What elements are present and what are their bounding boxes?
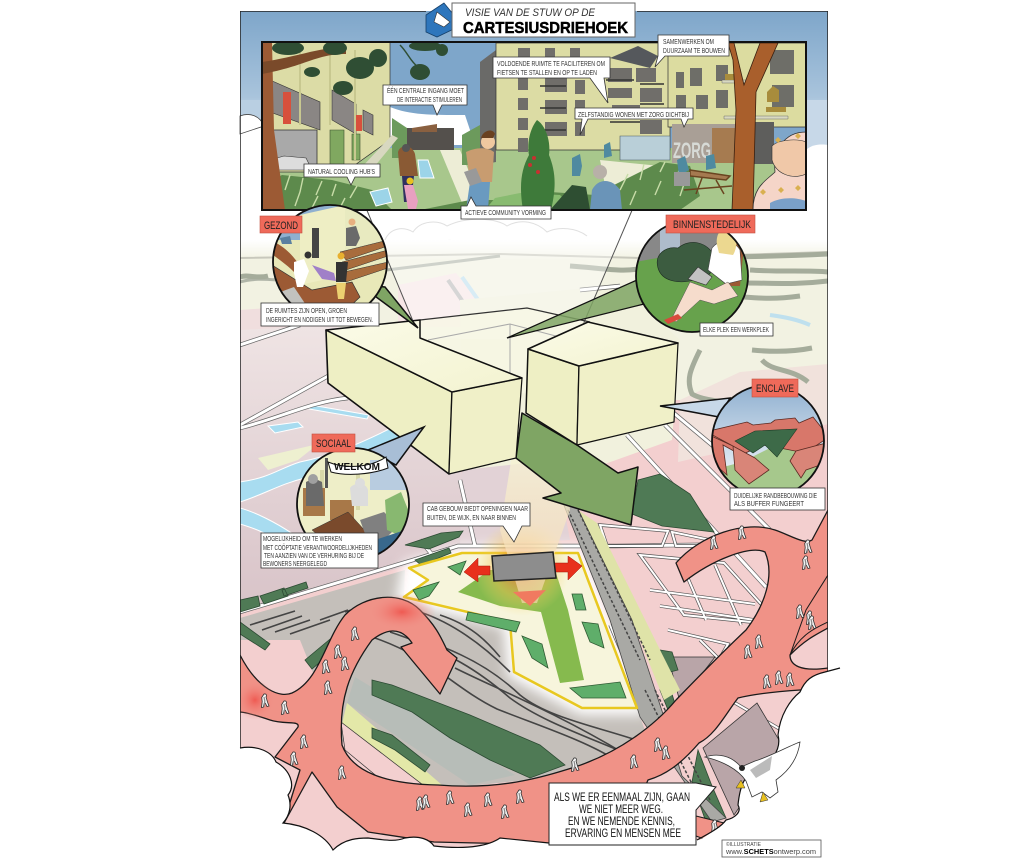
textbox enclave: ALS BUFFER FUNGEERT bbox=[734, 501, 805, 508]
bubble: centrale ingang: DE INTERACTIE STIMULEREN bbox=[397, 97, 462, 104]
top panel illustration bbox=[262, 41, 806, 210]
beam arrow bbox=[513, 590, 546, 606]
ghost building bbox=[420, 308, 672, 400]
callout bottom: ALS WE ER EENMAAL ZIJN, GAAN bbox=[554, 790, 690, 804]
textbox gezond: INGERICHT EN NODIGEN UIT TOT BEWEGEN. bbox=[266, 317, 373, 324]
title box bbox=[452, 3, 635, 37]
title box: VISIE VAN DE STUW OP DE bbox=[465, 7, 596, 19]
grey rail yard bbox=[240, 570, 650, 790]
bubble: cooling bbox=[304, 164, 380, 185]
label sociaal: SOCIAAL bbox=[316, 438, 351, 450]
bubble: centrale ingang bbox=[383, 85, 467, 115]
street blocks bbox=[600, 525, 790, 735]
tree bands grey-green bbox=[240, 254, 828, 404]
label binnenstedelijk bbox=[666, 215, 755, 233]
label gezond: GEZOND bbox=[264, 220, 298, 232]
callout bottom: EN WE NEMENDE KENNIS, bbox=[568, 814, 675, 828]
red arrow right bbox=[554, 556, 582, 580]
roads bbox=[240, 286, 830, 612]
bubble: cab gebouw: CAB GEBOUW BIEDT OPENINGEN NAAR bbox=[427, 506, 528, 513]
callout bottom: WE NIET MEER WEG. bbox=[579, 802, 663, 816]
textbox gezond bbox=[261, 303, 379, 326]
clouds behind panel bbox=[385, 219, 587, 250]
cloud bbox=[390, 107, 475, 145]
glow around plot bbox=[404, 553, 637, 708]
bubble: fietsen: FIETSEN TE STALLEN EN OP TE LADEN bbox=[497, 70, 597, 77]
block: left building bbox=[326, 320, 522, 474]
callout bottom: ERVARING EN MENSEN MEE bbox=[565, 826, 681, 840]
bubble: duurzaam: SAMENWERKEN OM bbox=[663, 39, 714, 46]
title logo bbox=[426, 3, 462, 37]
red arrow left bbox=[464, 558, 490, 582]
care pavilion bbox=[620, 136, 670, 160]
bubble: duurzaam: DUURZAAM TE BOUWEN bbox=[663, 48, 725, 55]
tracks bbox=[250, 609, 632, 754]
tree left bbox=[262, 42, 285, 210]
tree right bbox=[728, 43, 778, 210]
plot patches bbox=[413, 561, 626, 698]
middle building bbox=[480, 50, 496, 165]
textbox werkplek: ELKE PLEK EEN WERKPLEK bbox=[703, 327, 769, 334]
green arrow bbox=[516, 413, 638, 525]
picnic table bbox=[684, 170, 732, 194]
sky background bbox=[240, 11, 828, 225]
bubble: community: ACTIEVE COMMUNITY VORMING bbox=[465, 210, 546, 217]
label sociaal bbox=[312, 434, 355, 452]
textbox sociaal: BEWONERS NEERGELEGD bbox=[263, 561, 327, 568]
frame lines bbox=[240, 11, 828, 750]
right railway bbox=[563, 503, 726, 822]
people walking on flow bbox=[262, 526, 816, 834]
title box: CARTESIUSDRIEHOEK bbox=[463, 20, 628, 37]
bottom clouds bbox=[236, 668, 840, 859]
label enclave bbox=[752, 379, 798, 397]
textbox sociaal: TEN AANZIEN VAN DE VERHURING BIJ DE bbox=[264, 553, 364, 560]
bubble: zelfstandig: ZELFSTANDIG WONEN MET ZORG DICHTBIJ bbox=[578, 112, 689, 119]
ZORG lettering: ZORG bbox=[673, 138, 711, 163]
block: right building bbox=[526, 322, 678, 445]
bubble: fietsen: VOLDOENDE RUIMTE TE FACILITEREN OM bbox=[497, 61, 605, 68]
ground bbox=[280, 148, 775, 209]
green field bbox=[458, 570, 584, 683]
funnel from top panel bbox=[366, 208, 633, 341]
tomato plant bbox=[521, 120, 555, 210]
building plot centre bbox=[464, 552, 582, 582]
banner welkom: WELKOM bbox=[334, 462, 380, 473]
field strips inside ring bbox=[347, 677, 515, 785]
water bbox=[240, 405, 400, 542]
gull bbox=[705, 742, 800, 802]
grey building bbox=[492, 552, 556, 581]
people background bbox=[572, 142, 716, 176]
credit logo: ©ILLUSTRATIE bbox=[726, 841, 762, 848]
textbox enclave bbox=[730, 488, 825, 510]
label enclave: ENCLAVE bbox=[756, 383, 794, 395]
green speech tail binnenstedelijk bbox=[507, 280, 644, 338]
right building bbox=[668, 43, 806, 127]
label gezond bbox=[260, 216, 302, 233]
circle: enclave bbox=[660, 385, 829, 497]
callout bottom bbox=[549, 783, 716, 845]
bubble: cab gebouw bbox=[423, 503, 530, 542]
man with child bbox=[398, 146, 418, 176]
bubble: fietsen bbox=[493, 57, 610, 103]
yellow plot bbox=[404, 553, 637, 708]
bubble: duurzaam bbox=[655, 35, 729, 67]
grass plants bbox=[262, 162, 700, 210]
elder bbox=[590, 181, 622, 210]
textbox sociaal: MOGELIJKHEID OM TE WERKEN bbox=[263, 536, 342, 543]
label binnenstedelijk: BINNENSTEDELIJK bbox=[673, 219, 752, 231]
textbox werkplek bbox=[700, 323, 773, 336]
textbox gezond: DE RUIMTES ZIJN OPEN, GROEN bbox=[266, 308, 347, 315]
credit logo bbox=[722, 840, 821, 857]
left building bbox=[262, 42, 390, 172]
pale green rail edges bbox=[575, 508, 680, 700]
landscape map bbox=[235, 11, 830, 859]
pond bbox=[370, 160, 434, 206]
bubble: zelfstandig bbox=[575, 108, 693, 135]
light beam to site bbox=[500, 440, 570, 603]
circle: sociaal bbox=[296, 427, 424, 560]
solar roof bbox=[610, 46, 658, 68]
circle: gezond bbox=[270, 200, 390, 325]
mauve blocks bbox=[668, 657, 782, 815]
textbox sociaal bbox=[261, 533, 378, 568]
circle: binnenstedelijk bbox=[635, 220, 750, 335]
site plan bbox=[404, 520, 637, 708]
pink flow band bbox=[235, 510, 828, 845]
tree strips dark green bbox=[240, 474, 726, 854]
banner welkom bbox=[328, 457, 388, 474]
bubble: centrale ingang: ÉÉN CENTRALE INGANG MOET bbox=[387, 86, 465, 95]
textbox sociaal: MET COÖPTATIE VERANTWOORDELIJKHEDEN bbox=[263, 544, 372, 552]
bubble: cooling: NATURAL COOLING HUB'S bbox=[308, 169, 375, 176]
headscarf girl bbox=[753, 132, 806, 210]
credit logo: www.SCHETSontwerp.com bbox=[725, 847, 816, 856]
woman watering bbox=[466, 148, 494, 182]
textbox enclave: DUIDELIJKE RANDBEBOUWING DIE bbox=[734, 493, 817, 500]
bubble: cab gebouw: BUITEN, DE WIJK, EN NAAR BINNEN bbox=[427, 515, 516, 522]
green speech tail gezond bbox=[360, 285, 418, 328]
distant building bbox=[405, 128, 454, 150]
bubble: community bbox=[461, 197, 551, 219]
